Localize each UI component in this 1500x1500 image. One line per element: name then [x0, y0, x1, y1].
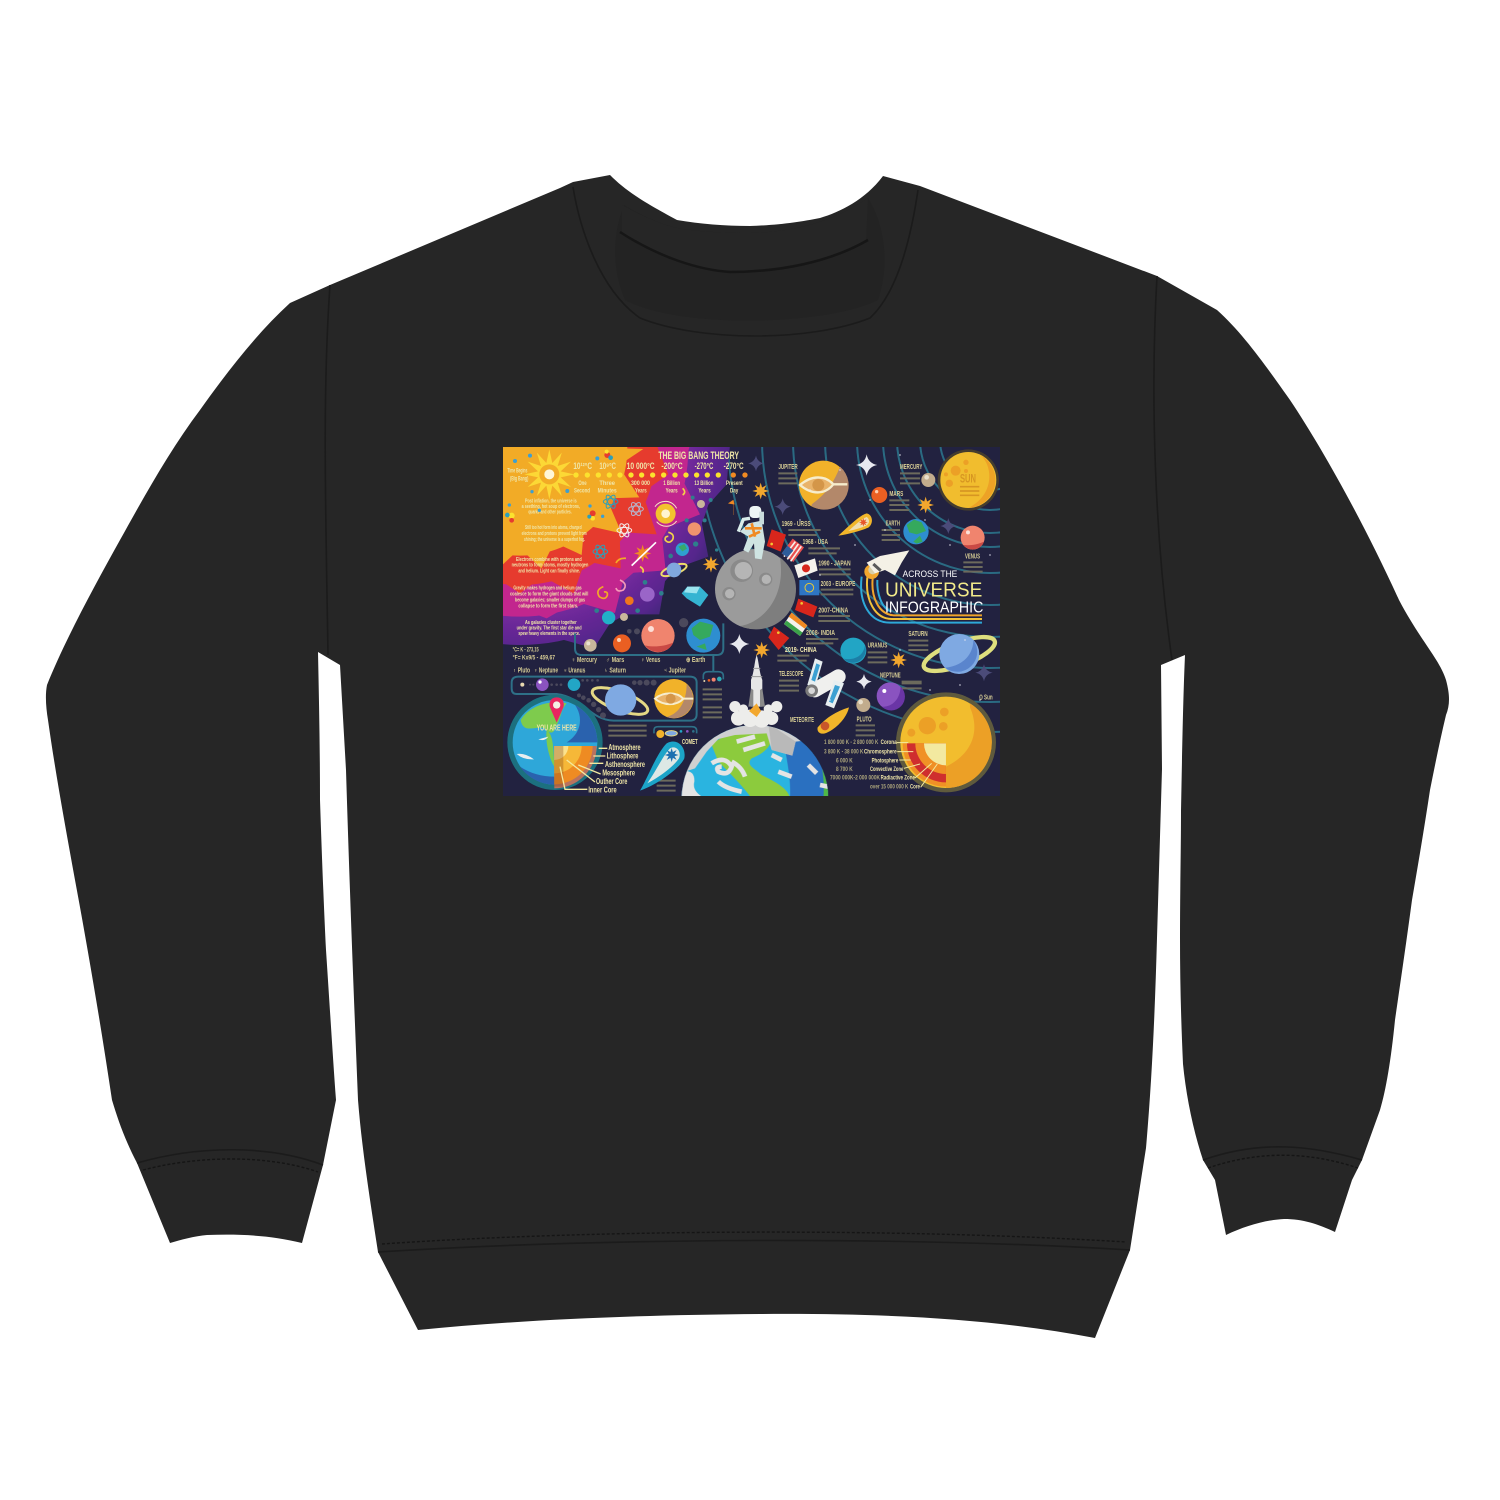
- timeline periods: Years: [666, 487, 678, 494]
- labels: planets and missions: 2007-CHINA: [818, 606, 849, 615]
- print background: [503, 447, 1000, 796]
- earth layers labels: Lithosphere: [607, 751, 639, 761]
- small planets group: [703, 672, 723, 682]
- timeline temperatures: 10⁹°C: [599, 461, 616, 471]
- timeline dots: [573, 472, 748, 478]
- planet legend row 1: ♂ Mars: [606, 657, 624, 664]
- icon: rocket exhaust cloud: [729, 701, 782, 728]
- icon: flag on moon: [728, 500, 734, 515]
- earth layers labels: Outher Core: [596, 776, 628, 786]
- conversion formulas: °C= K - 273,15: [513, 645, 539, 653]
- icon: time zero sun: [524, 449, 574, 499]
- labels: planets and objects: [779, 628, 993, 724]
- text: galaxies cluster: spew heavy elements in the space.: [518, 631, 580, 637]
- flag: India: [784, 613, 807, 636]
- icon: jupiter: [799, 461, 849, 510]
- labels: planets and missions: [778, 462, 980, 615]
- planet legend row 1: ⊕ Earth: [686, 657, 705, 664]
- collar back band: [622, 198, 868, 271]
- text: too hot: electrons and protons prevent light from: [522, 531, 587, 537]
- icon: pluto: [856, 698, 870, 712]
- earth layers labels: Atmosphere: [608, 742, 641, 752]
- icon: large comet: [640, 741, 685, 791]
- sun temperature labels: 3 800 K - 38 000 K: [824, 748, 863, 755]
- labels: planets and objects: NEPTUNE: [880, 671, 901, 680]
- collar rib seam: [573, 187, 918, 336]
- timeline temperatures: [574, 462, 744, 469]
- timeline periods: 300 000: [631, 480, 650, 487]
- text: electrons combine: [512, 557, 588, 575]
- sun temperature labels: over 15 000 000 K: [870, 784, 908, 791]
- icon: neptune: [877, 682, 905, 710]
- earth layers labels: Mesosphere: [602, 768, 635, 778]
- sweatshirt body and sleeves: [46, 175, 1449, 1338]
- title: THE BIG BANG THEORY: [658, 450, 739, 462]
- earth layers labels: Inner Core: [588, 784, 617, 794]
- timeline periods: Second: [574, 487, 590, 494]
- timeline periods: Minutes: [598, 487, 617, 494]
- panel: moon and space race: [715, 506, 819, 654]
- planets row: pluto neptune uranus saturn jupiter: [520, 678, 694, 720]
- labels: planets and missions: 1968 - USA: [803, 537, 828, 546]
- neck stitching: [620, 232, 868, 272]
- planet legend row 1: ♀ Venus: [641, 657, 660, 664]
- planet legend row 2: ♆ Neptune: [534, 668, 558, 675]
- labels: planets and objects: TELESCOPE: [779, 669, 803, 678]
- icon: meteorite: [817, 707, 849, 734]
- labels: planets and objects: 2019- CHINA: [785, 645, 817, 654]
- timeline temperatures: 10 000°C: [627, 461, 655, 471]
- planet legend row 2: ♇ Pluto: [513, 668, 530, 675]
- placeholder text lines: [608, 689, 722, 791]
- sun layer names: Core: [910, 784, 920, 791]
- printed infographic: [503, 447, 1000, 796]
- title: [885, 569, 983, 616]
- purple burst ring: [503, 447, 730, 646]
- icon: sun: [938, 449, 999, 511]
- icon: saturn: [920, 630, 999, 678]
- atoms and particles: [505, 450, 643, 560]
- icon: map pin: [550, 697, 564, 723]
- text: galaxies cluster: under gravity. The first star die and: [517, 625, 582, 631]
- timeline periods: Three: [599, 480, 615, 487]
- title: ACROSS THE: [903, 569, 957, 579]
- bracket: comet group: [654, 727, 697, 738]
- planet legend row 1: ♀ Mercury: [572, 657, 597, 664]
- outer planets box: [512, 677, 697, 721]
- planets cluster: [602, 500, 705, 624]
- timeline periods: One: [578, 480, 587, 487]
- text: galaxies cluster: As galaxies cluster together: [525, 620, 577, 626]
- timeline periods: [574, 480, 743, 494]
- icon: mercury: [921, 473, 935, 487]
- labels: planets and missions: VENUS: [965, 552, 980, 561]
- panel: solar system top: [748, 449, 999, 623]
- timeline periods: Years: [635, 487, 647, 494]
- timeline periods: Present: [726, 480, 743, 487]
- earth layers labels: Asthenosphere: [605, 759, 645, 769]
- icon: big earth: [675, 635, 842, 872]
- orbit lines: [706, 447, 1000, 733]
- blue particles: [508, 454, 604, 518]
- flag: Europe: [799, 580, 819, 595]
- text: gravity: collapse to form the first stars.: [518, 604, 579, 610]
- timeline temperatures: -270°C: [724, 461, 744, 471]
- labels: planets and objects: SATURN: [908, 629, 928, 638]
- planet legend row 2: [513, 668, 686, 675]
- planets row: mercury mars venus earth: [584, 618, 720, 653]
- flag: USA: [782, 539, 804, 562]
- text: post inflation: [522, 498, 580, 516]
- icon: star: [703, 556, 719, 573]
- icon: spiral galaxies: [598, 488, 685, 598]
- moon: [715, 549, 796, 629]
- text: post inflation: Post inflation, the universe is: [525, 498, 577, 504]
- stars: [748, 454, 956, 534]
- sweatshirt: [46, 175, 1449, 1338]
- text: gravity: [510, 586, 589, 610]
- teal dots: [594, 496, 718, 613]
- text: electrons combine: neutrons to form atoms, mostly hydrogen: [512, 563, 588, 569]
- flag: Japan: [794, 558, 818, 578]
- timeline temperatures: -270°C: [695, 461, 714, 471]
- timeline periods: 13 Billion: [694, 480, 713, 487]
- sun temperature labels: 1 800 000 K - 2 800 000 K: [824, 739, 878, 746]
- conversion formulas: °F= Kx9/5 - 459,67: [513, 653, 555, 661]
- panel: bottom right solar system: [753, 628, 999, 792]
- icon: space shuttle: [867, 550, 909, 575]
- text: gravity: Gravity makes hydrogen and helium gas: [513, 586, 582, 592]
- icon: mars: [871, 487, 887, 503]
- panel: bottom left earth and planets: [507, 618, 723, 794]
- time begins label: (Big Bang): [510, 475, 528, 482]
- timeline periods: 1 Billion: [663, 480, 680, 487]
- text: gravity: become galaxies; smaller clumps of gas: [515, 598, 585, 604]
- text: galaxies cluster: [517, 620, 582, 637]
- icon: earth: [903, 519, 929, 544]
- time begins label: [507, 467, 528, 482]
- sun temperature labels: 6 000 K: [836, 757, 853, 764]
- icon: uranus: [840, 638, 866, 664]
- icon: galaxy: [655, 501, 677, 526]
- icon: telescope: [805, 658, 844, 708]
- panel: big bang timeline: [503, 447, 748, 646]
- stars: [753, 642, 993, 689]
- labels: planets and missions: 2003 - EUROPE: [821, 579, 855, 588]
- collar inner: [615, 198, 885, 321]
- timeline periods: Day: [730, 487, 739, 494]
- placeholder text lines: [777, 639, 928, 735]
- icon: rainbow swoosh: [861, 564, 982, 623]
- timeline temperatures: -200°C: [661, 461, 683, 471]
- text: too hot: [522, 525, 587, 543]
- magenta burst ring: [503, 447, 700, 618]
- timeline temperatures: 10¹²°C: [573, 461, 592, 471]
- labels: planets and objects: ⊙ Sun: [979, 693, 993, 702]
- shoulder and sleeve seams: [137, 276, 1362, 1252]
- sun layer names: Convective Zone: [870, 766, 904, 773]
- title: UNIVERSE: [885, 579, 982, 602]
- labels: planets and missions: 1969 - URSS: [782, 519, 811, 528]
- labels: planets and missions: 1990 - JAPAN: [818, 558, 851, 567]
- icon: comet: [838, 513, 872, 536]
- labels: planets and missions: MERCURY: [900, 462, 922, 471]
- sun layer names: [864, 739, 920, 791]
- planet legend row 2: ♅ Uranus: [563, 668, 585, 675]
- earth cross-section: [507, 695, 603, 790]
- sleeve and hem stitching: [143, 1155, 1358, 1244]
- sun layer names: Chromosphere: [864, 748, 897, 755]
- placeholder text lines: [778, 473, 983, 621]
- icon: large sun cross section: [896, 692, 996, 792]
- icon: crystal asteroid: [682, 587, 708, 607]
- sun layer leader lines: [897, 743, 937, 787]
- you are here: YOU ARE HERE: [537, 723, 577, 733]
- text: too hot: Still too hot form into atoms, charged: [525, 525, 582, 531]
- text: electrons combine: and helium. Light can finally shine.: [518, 569, 580, 575]
- text: post inflation: a seething, hot soup of electrons,: [522, 504, 580, 510]
- sun layer names: Radiactive Zone: [881, 774, 915, 781]
- planet legend row 2: ♃ Jupiter: [663, 668, 686, 675]
- space dust dots: [799, 454, 991, 701]
- big earth and rocket: [675, 635, 842, 872]
- time begins label: Time Begins: [507, 467, 528, 474]
- planet legend row 1: [572, 657, 705, 664]
- comet label: COMET: [682, 737, 698, 746]
- labels: planets and objects: METEORITE: [790, 715, 814, 724]
- astronaut: [738, 506, 765, 559]
- sun temperature labels: 8 700 K: [836, 766, 853, 773]
- planet legend row 2: ♄ Saturn: [604, 668, 626, 675]
- sun temperature labels: 7000 000K-2 000 000K: [830, 774, 880, 781]
- sun layer names: Corona: [881, 739, 897, 746]
- text: gravity: coalesce to form the giant clouds that will: [510, 592, 589, 598]
- flag: China: [795, 599, 817, 617]
- text: too hot: shining; the universe is a superhot fog.: [524, 537, 585, 543]
- text: post inflation: quarks and other particles.: [528, 510, 572, 516]
- flag: USSR: [767, 529, 786, 552]
- icon: sun: SUN: [960, 471, 976, 485]
- labels: planets and missions: JUPITER: [778, 462, 798, 471]
- title: INFOGRAPHIC: [885, 599, 983, 616]
- sun layer names: Photosphere: [872, 757, 899, 764]
- icon: rocket: [748, 655, 765, 717]
- timeline periods: Years: [698, 487, 711, 494]
- flag: China 2019: [768, 627, 789, 650]
- sun temperature labels: [824, 739, 908, 791]
- earth layers labels: [588, 742, 645, 794]
- labels: planets and missions: MARS: [889, 489, 903, 498]
- text: electrons combine: Electrons combine with protons and: [516, 557, 582, 563]
- icon: venus: [961, 526, 985, 550]
- inner planets box: [575, 623, 723, 672]
- labels: planets and missions: EARTH: [886, 518, 900, 527]
- layer leader lines: [560, 748, 607, 789]
- labels: planets and objects: URANUS: [868, 640, 887, 649]
- icon: exploding star comet: [632, 542, 656, 566]
- orange burst core: [503, 447, 644, 568]
- conversion formulas: [513, 645, 555, 661]
- red burst ring: [503, 447, 668, 594]
- labels: planets and objects: 2008- INDIA: [806, 628, 835, 637]
- icon: white star: [729, 634, 749, 654]
- labels: planets and objects: PLUTO: [857, 714, 872, 723]
